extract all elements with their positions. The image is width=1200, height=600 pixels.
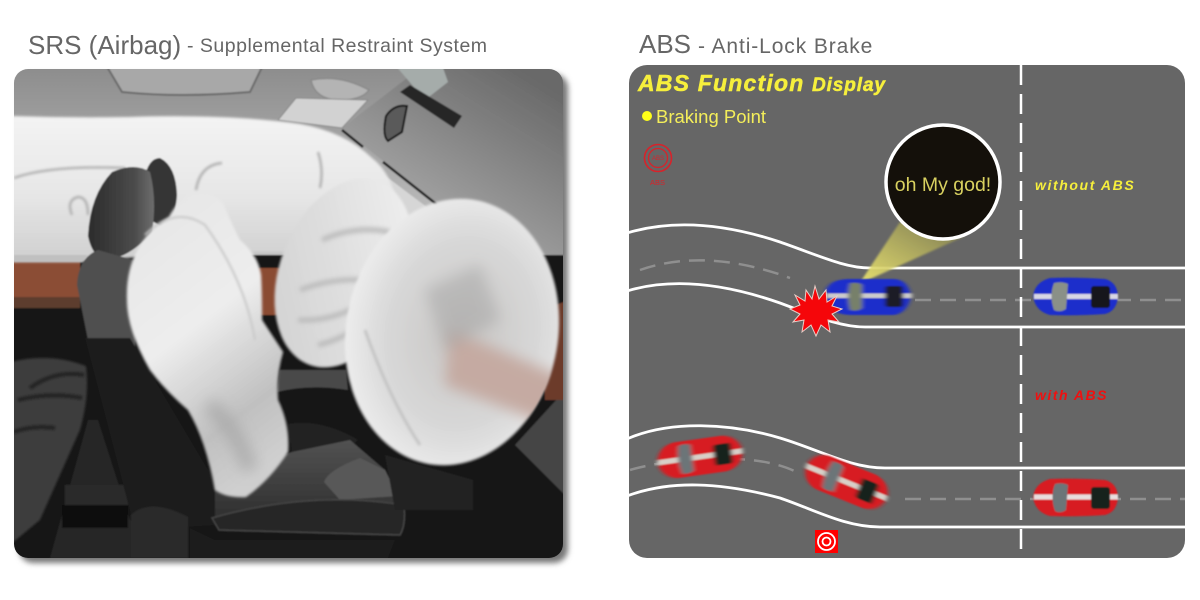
label: with ABS: with ABS bbox=[1035, 387, 1108, 403]
front seat back bbox=[76, 250, 214, 500]
target marker bbox=[815, 530, 838, 553]
rear seat bbox=[10, 358, 87, 545]
overhead console bbox=[278, 65, 448, 128]
centre vertical dashed line bbox=[1020, 65, 1022, 558]
car: red stopped bbox=[1033, 479, 1118, 516]
car: blue skidding bbox=[826, 279, 912, 315]
icon: ABS warning: ABS bbox=[652, 156, 664, 162]
seat cushion bbox=[131, 440, 404, 558]
title: ABS Function Display: Display bbox=[812, 75, 886, 96]
heading: ABS: ABS bbox=[639, 29, 691, 59]
legend: braking point: Braking Point bbox=[656, 106, 766, 127]
crash burst bbox=[790, 286, 842, 336]
centre console bbox=[277, 370, 358, 452]
front airbag: passenger upper bbox=[272, 192, 408, 370]
heading: SRS (Airbag): SRS (Airbag) bbox=[28, 30, 181, 60]
road lines: without ABS bbox=[627, 225, 1187, 327]
car: red first position bbox=[655, 433, 745, 481]
lower cabin bbox=[10, 255, 570, 565]
wood trim bbox=[10, 261, 80, 297]
lane dashes bbox=[630, 260, 1187, 499]
sunroof bbox=[106, 65, 263, 95]
panel shadow: airbag photo bbox=[19, 74, 568, 563]
rear headrest bbox=[144, 158, 177, 228]
right footwell bbox=[385, 455, 473, 510]
side airbag bbox=[127, 193, 288, 497]
rear view mirror bbox=[384, 85, 462, 141]
car: blue stopped bbox=[1033, 278, 1118, 315]
title: ABS Function Display: ABS Function bbox=[637, 70, 804, 96]
car: red braking bbox=[802, 453, 890, 510]
icon: ABS warning: ABS bbox=[650, 178, 665, 187]
speech bubble: oh My god! bbox=[895, 174, 991, 196]
road lines: with ABS bbox=[627, 426, 1187, 527]
heading: ABS: - Anti-Lock Brake bbox=[698, 35, 873, 58]
windshield bbox=[354, 69, 563, 256]
speech bubble bbox=[886, 125, 1000, 239]
A pillar trim bbox=[342, 130, 440, 207]
label: without ABS: without ABS bbox=[1035, 177, 1135, 193]
panel: airbag photo bbox=[10, 65, 580, 565]
front headrest bbox=[88, 167, 154, 260]
icon: ABS warning bbox=[644, 144, 672, 187]
floor bbox=[50, 420, 130, 558]
front airbag: large bbox=[344, 197, 561, 468]
curtain airbag bbox=[10, 116, 396, 262]
panel: ABS road diagram bbox=[627, 65, 1187, 558]
beam from car to speech bubble bbox=[859, 222, 965, 284]
heading: SRS (Airbag): - Supplemental Restraint System bbox=[187, 35, 488, 57]
